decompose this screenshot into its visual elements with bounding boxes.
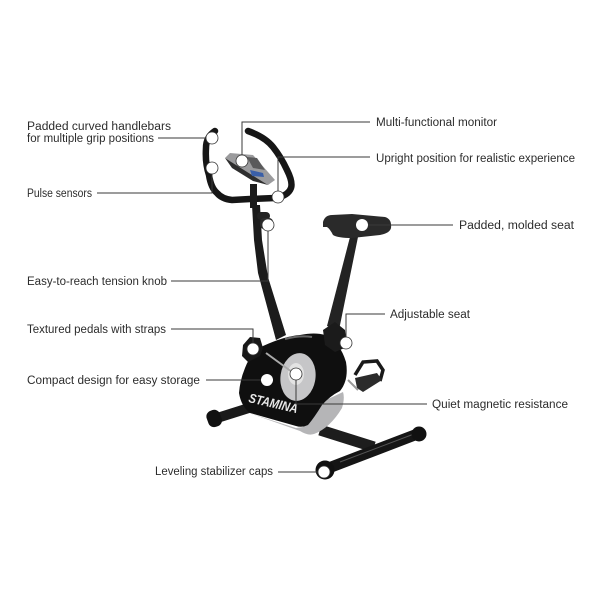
tension knob <box>257 212 273 229</box>
callout: handlebars: for multiple grip positions <box>27 133 154 145</box>
callout: adjustable seat: Adjustable seat <box>390 309 471 321</box>
seat post <box>327 237 358 330</box>
callout: seat <box>356 219 575 232</box>
monitor stem <box>250 184 257 208</box>
main flywheel housing <box>239 334 347 427</box>
seat <box>323 214 391 238</box>
callout: stabilizer caps: Leveling stabilizer caps <box>155 466 273 478</box>
housing highlight <box>285 336 312 339</box>
exercise bike illustration <box>205 131 426 480</box>
callout: monitor: Multi-functional monitor <box>376 117 497 129</box>
callout: stabilizer caps <box>155 466 330 478</box>
callout: pedals <box>27 324 259 355</box>
callout: compact design: Compact design for easy storage <box>27 375 200 387</box>
callout: handlebars: Padded curved handlebars <box>27 121 171 133</box>
monitor <box>225 153 275 185</box>
center frame bar <box>320 430 374 447</box>
callout: monitor <box>236 117 497 167</box>
callout: tension knob <box>27 219 274 288</box>
right pedal with strap <box>348 361 383 392</box>
callout: magnetic resistance <box>290 368 568 411</box>
callout: pulse sensors <box>27 162 218 200</box>
callout: adjustable seat <box>340 309 471 349</box>
brand logo: STAMINA <box>247 390 299 416</box>
left pedal with strap <box>242 337 263 362</box>
callout: handlebars <box>27 121 218 145</box>
callout: pedals: Textured pedals with straps <box>27 324 166 336</box>
callout: upright position: Upright position for realistic experience <box>376 153 575 165</box>
front stabilizer bar <box>316 426 426 480</box>
callout: upright position <box>272 153 575 203</box>
callout: tension knob: Easy-to-reach tension knob <box>27 276 167 288</box>
rear stabilizer foot <box>205 407 252 429</box>
callout: magnetic resistance: Quiet magnetic resistance <box>432 399 568 411</box>
callout: seat: Padded, molded seat <box>459 220 575 232</box>
seat post clamp <box>323 322 347 352</box>
upright post <box>252 205 286 340</box>
crank arm <box>266 353 292 372</box>
silver flywheel disc <box>277 351 319 403</box>
silver lower housing <box>249 392 344 435</box>
callout: compact design <box>27 374 273 387</box>
handlebars <box>206 131 292 200</box>
callout: pulse sensors: Pulse sensors <box>27 188 92 200</box>
